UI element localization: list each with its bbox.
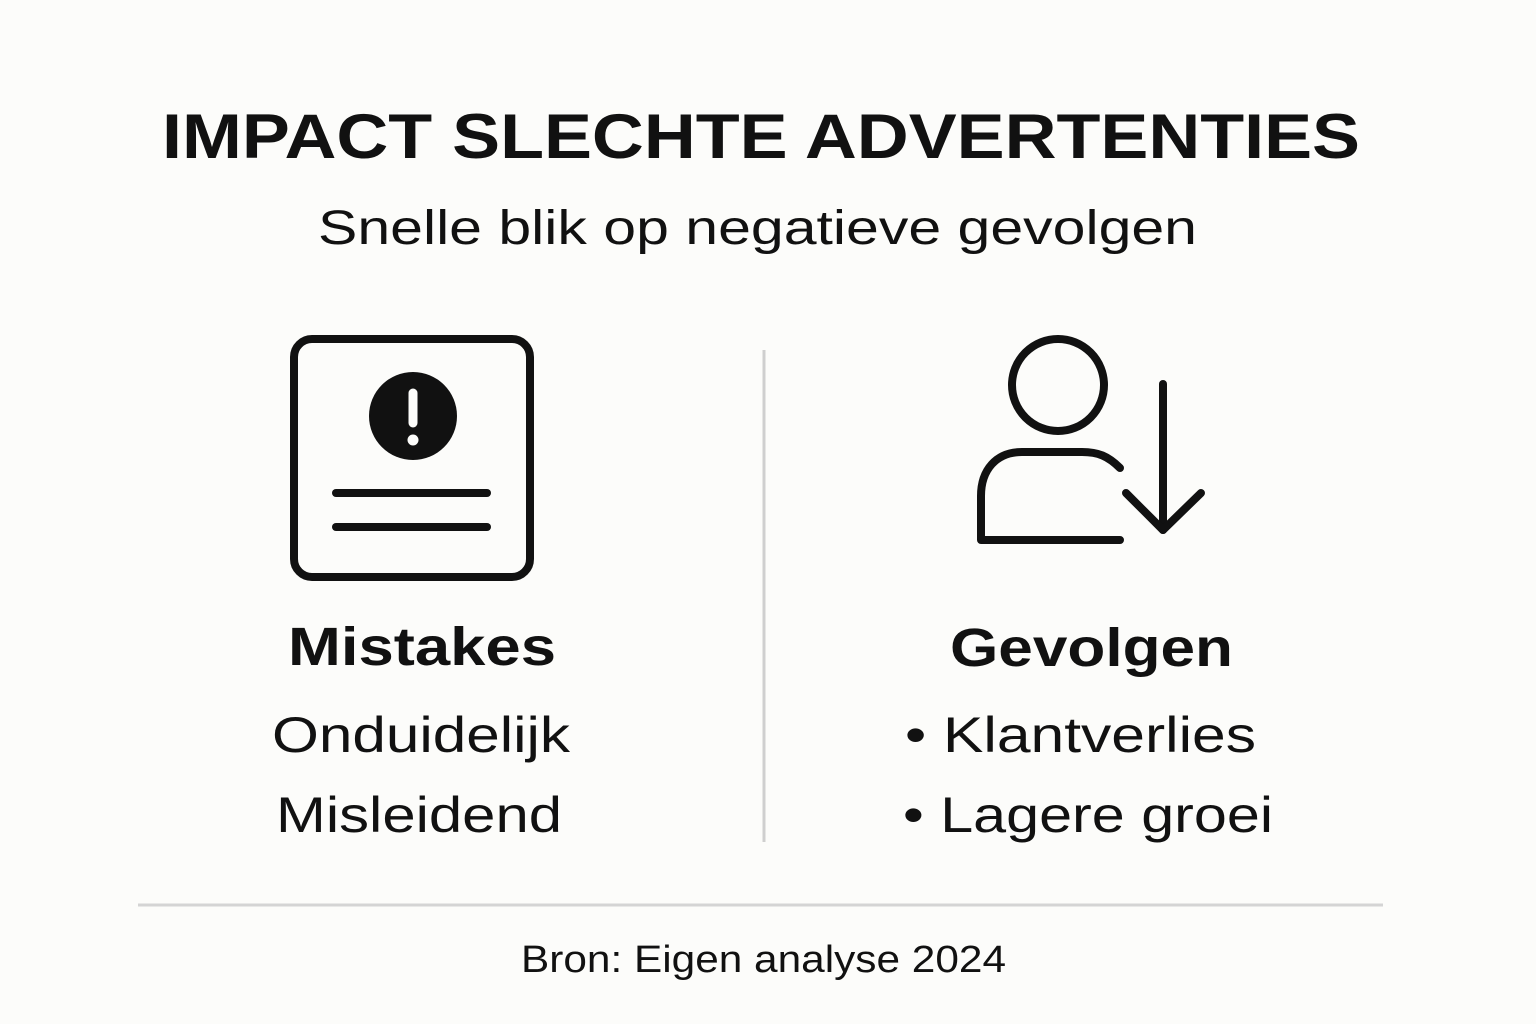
text: gevolgen list bbox=[903, 707, 1273, 843]
icon: user with down arrow bbox=[981, 339, 1201, 540]
heading: Gevolgen: Gevolgen bbox=[950, 618, 1233, 678]
source note: Bron: Eigen analyse 2024 bbox=[521, 939, 1006, 981]
text: gevolgen list: • Klantverlies bbox=[905, 707, 1256, 763]
panel: mistakes bbox=[272, 339, 571, 843]
text: mistakes list bbox=[272, 707, 571, 843]
subtitle: Snelle blik op negatieve gevolgen bbox=[318, 202, 1197, 255]
icon: warning document bbox=[294, 339, 530, 577]
heading: Mistakes: Mistakes bbox=[288, 617, 556, 677]
title: IMPACT SLECHTE ADVERTENTIES bbox=[162, 102, 1360, 172]
text: mistakes list: Misleidend bbox=[276, 787, 562, 843]
text: gevolgen list: • Lagere groei bbox=[903, 787, 1273, 843]
text: mistakes list: Onduidelijk bbox=[272, 707, 571, 763]
panel: gevolgen bbox=[903, 339, 1273, 843]
